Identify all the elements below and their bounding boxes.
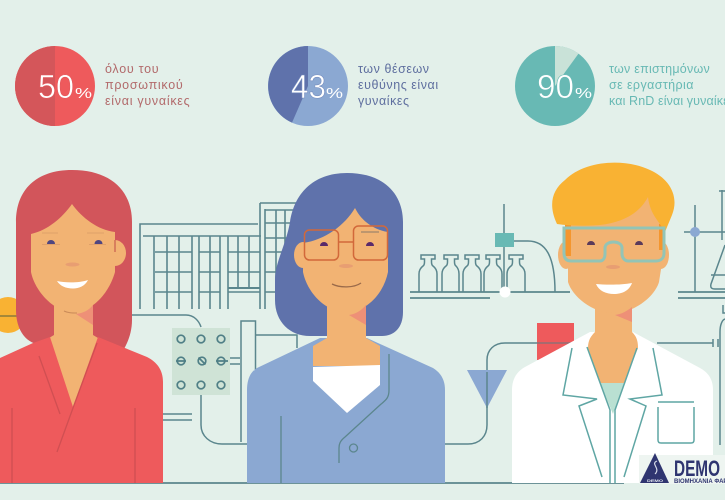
hair bbox=[16, 170, 132, 349]
panel: green valve plate bbox=[172, 328, 230, 395]
pie chart: 50%: 50 bbox=[38, 68, 74, 105]
blouse folds bbox=[12, 343, 135, 483]
logo mark bbox=[655, 461, 657, 474]
stand clamp dot bbox=[690, 227, 700, 237]
pipe across red square bbox=[537, 342, 575, 344]
logo mark label: DEMO bbox=[647, 478, 663, 483]
ears bbox=[558, 241, 669, 269]
neck shadow bbox=[349, 305, 366, 325]
jaw line bbox=[64, 311, 77, 313]
caption: 50%: όλου του bbox=[105, 62, 159, 76]
eyes and brows bbox=[42, 233, 106, 244]
baseline bbox=[0, 482, 624, 484]
orange circle on the left bbox=[0, 297, 26, 333]
pie chart: 50% bbox=[15, 46, 95, 126]
caption: 43%: ευθύνης είναι bbox=[358, 78, 439, 92]
ear shadow bbox=[114, 240, 116, 252]
pie chart: 50%: % bbox=[75, 85, 92, 102]
neck and chest bbox=[588, 295, 638, 383]
white shelf joint bbox=[500, 286, 510, 298]
white strip behind logo bbox=[639, 455, 725, 484]
caption: 50%: είναι γυναίκες bbox=[105, 94, 190, 108]
face bbox=[303, 208, 388, 312]
orange glasses bbox=[304, 226, 388, 260]
pie chart: 43%: % bbox=[326, 85, 343, 102]
person: scientist with goggles bbox=[512, 163, 713, 483]
pie chart: 90%: % bbox=[575, 85, 592, 102]
building line drawing bbox=[140, 203, 300, 309]
neck shadow bbox=[615, 307, 632, 322]
pie chart: 90%: 90 bbox=[537, 68, 574, 105]
red square bbox=[537, 323, 574, 360]
coat collar and pocket lines bbox=[563, 347, 694, 483]
hair bbox=[275, 173, 403, 336]
person: woman in red bbox=[0, 170, 163, 483]
nose bbox=[606, 265, 620, 269]
pie chart: 90% bbox=[515, 46, 595, 126]
shirt bbox=[600, 383, 624, 414]
white shirt bbox=[313, 365, 380, 413]
nose bbox=[339, 264, 353, 268]
pie chart: 43%: 43 bbox=[291, 68, 326, 105]
smile bbox=[332, 283, 361, 287]
caption: 43%: γυναίκες bbox=[358, 94, 410, 108]
white lab coat bbox=[512, 332, 713, 483]
eyes and brow bbox=[320, 232, 379, 246]
smile bbox=[57, 280, 88, 288]
eyes bbox=[587, 241, 643, 245]
stat: 43 percent of leadership positions bbox=[268, 46, 439, 126]
icon: blue funnel bbox=[467, 370, 507, 408]
collar skin bbox=[313, 338, 380, 366]
logo: DEMO bbox=[640, 453, 725, 485]
caption: 43%: των θέσεων bbox=[358, 62, 430, 76]
stat: 90 percent of scientists bbox=[515, 46, 725, 126]
pipework and lab connections bbox=[130, 305, 725, 445]
goggles bbox=[564, 228, 664, 261]
orange hair bbox=[552, 163, 675, 232]
neck bbox=[327, 295, 366, 345]
logo triangle bbox=[640, 453, 669, 483]
caption: 90%: σε εργαστήρια bbox=[609, 78, 694, 92]
smile bbox=[596, 283, 632, 294]
teal control box bbox=[495, 233, 514, 247]
vials on the shelf bbox=[410, 204, 570, 298]
ear bbox=[104, 240, 126, 266]
hair shadow strips bbox=[565, 224, 664, 256]
face bbox=[568, 195, 664, 313]
ear bbox=[294, 242, 312, 268]
face bbox=[31, 204, 115, 312]
neck shadow bbox=[76, 305, 93, 325]
jacket seams and button bbox=[281, 354, 389, 483]
red blouse bbox=[0, 337, 163, 483]
funnel pipe overlay bbox=[486, 372, 488, 408]
blue jacket bbox=[247, 338, 445, 483]
nose bbox=[66, 262, 80, 266]
stat: 50 percent of staff bbox=[15, 46, 190, 126]
retort stand and flask bbox=[678, 190, 725, 298]
neck and chest bbox=[49, 295, 98, 408]
caption: 90%: των επιστημόνων bbox=[609, 62, 710, 76]
caption: 50%: προσωπικού bbox=[105, 78, 183, 92]
person: woman in blue with glasses bbox=[247, 173, 445, 483]
pie chart: 43% bbox=[268, 46, 348, 126]
